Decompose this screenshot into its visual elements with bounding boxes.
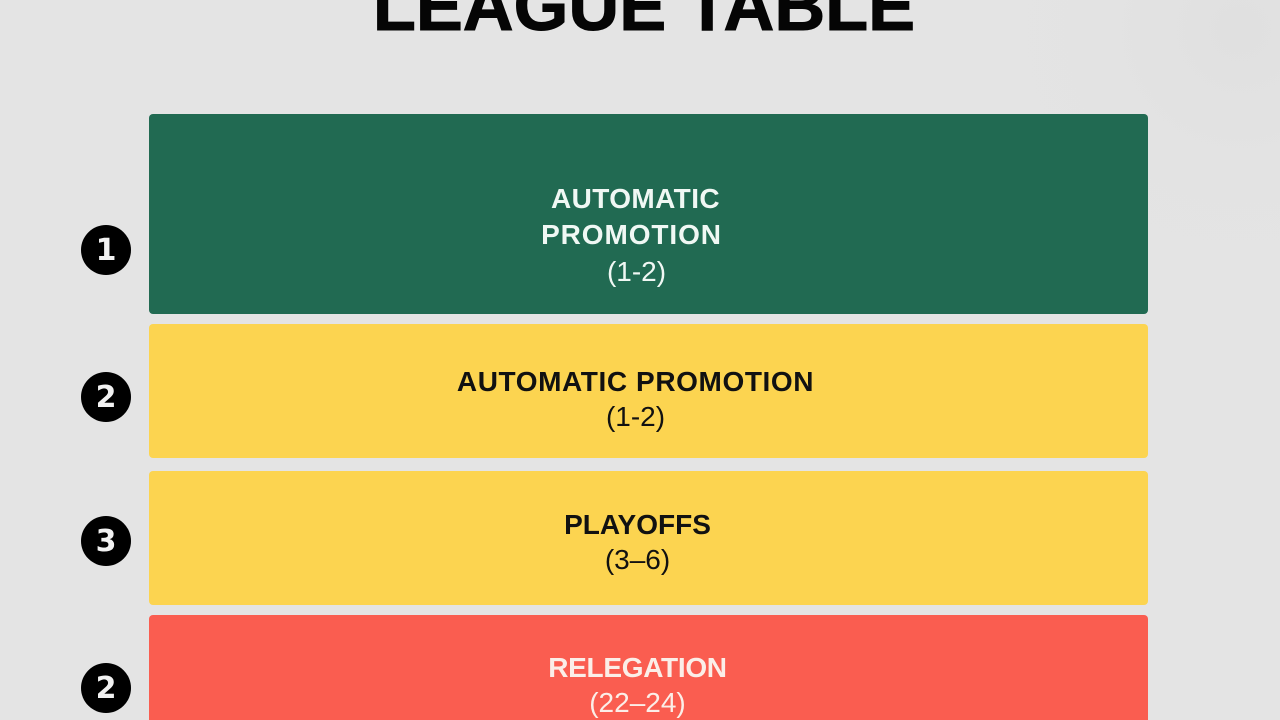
band label: promotion: PROMOTION [541,219,722,250]
band label: range 1-2: (1-2) [607,256,666,287]
number badge 1 [81,225,131,275]
band label: range 22-24: (22–24) [589,687,686,718]
band: automatic promotion, yellow [149,324,1148,458]
band label: playoffs: PLAYOFFS [564,509,711,540]
band label: relegation: RELEGATION [548,652,727,683]
band label: automatic: AUTOMATIC [551,183,720,214]
number badge 2: 2 [96,380,116,415]
number badge 1: 1 [96,233,116,268]
band label: automatic promotion: AUTOMATIC PROMOTION [457,366,814,397]
number badge 2 [81,372,131,422]
band: automatic promotion, green [149,114,1148,314]
number badge 2, lower: 2 [96,671,116,706]
number badge 3 [81,516,131,566]
number badge 2, lower [81,663,131,713]
band label: range 3-6: (3–6) [605,544,670,575]
number badge 3: 3 [96,524,116,559]
band label: range 1-2: (1-2) [606,401,665,432]
band: relegation, red [149,615,1148,720]
band: playoffs, yellow [149,471,1148,605]
